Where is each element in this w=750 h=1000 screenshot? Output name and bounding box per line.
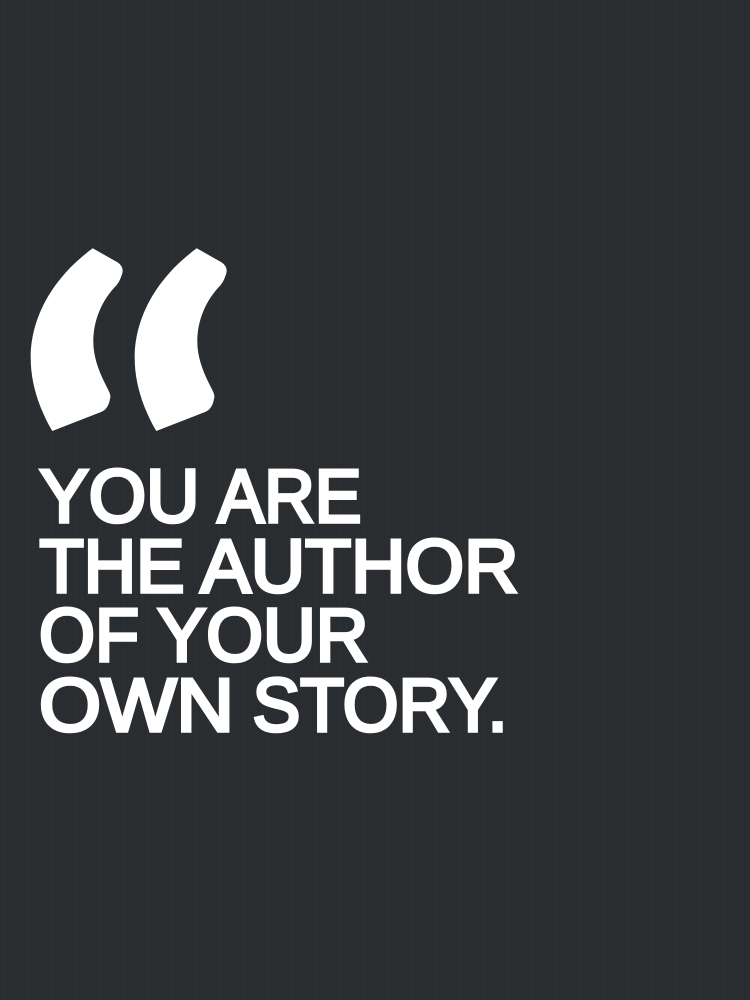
icon: opening quotation marks bbox=[31, 248, 227, 431]
line 3: OF bbox=[39, 593, 139, 677]
line 2: AUTHOR bbox=[200, 524, 518, 608]
line 2 bbox=[40, 524, 518, 608]
line 4: STORY. bbox=[252, 663, 508, 747]
line 1 bbox=[40, 454, 362, 538]
line 3: YOUR bbox=[158, 593, 368, 677]
line 1: ARE bbox=[218, 454, 362, 538]
line 4: OWN bbox=[39, 663, 234, 747]
line 2: THE bbox=[40, 524, 184, 608]
line 1: YOU bbox=[40, 454, 200, 538]
line 4 bbox=[39, 663, 508, 747]
quote text bbox=[39, 454, 518, 747]
line 3 bbox=[39, 593, 368, 677]
